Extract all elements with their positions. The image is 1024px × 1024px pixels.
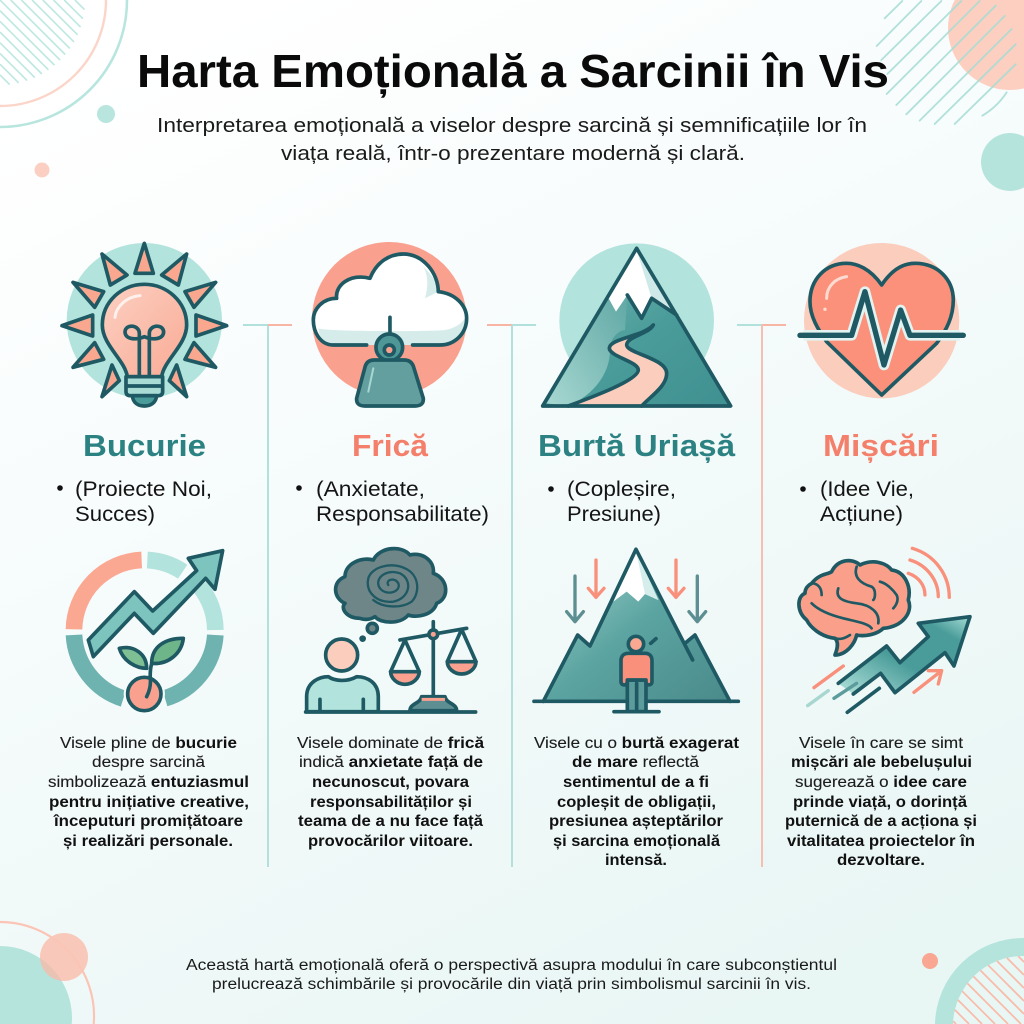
description: Mișcări: sugerează o idee care	[795, 774, 967, 791]
description: Frică: indică anxietate față de	[299, 754, 483, 771]
description: Frică	[297, 735, 484, 850]
icon: brain with rising arrow	[799, 548, 970, 712]
description: Burtă Uriașă: sentimentul de a fi	[563, 774, 709, 791]
decoration: top left circles	[0, 0, 127, 178]
panel: Frică	[296, 242, 489, 850]
description: Burtă Uriașă	[534, 735, 740, 869]
description: Frică: Visele dominate de frică	[297, 735, 484, 752]
footer note: prelucrează schimbările și provocările din viață prin simbolismul sarcinii în vis.	[212, 976, 811, 993]
bullet: Proiecte Noi, Succes: Succes)	[75, 503, 155, 526]
icon: person under mountain with pressure arrows	[534, 549, 738, 712]
description: Bucurie: și realizări personale.	[63, 833, 233, 850]
bullet: Idee Vie, Acțiune	[800, 478, 914, 526]
heading: Frică: Frică	[352, 428, 429, 463]
icon: heart with pulse	[800, 243, 963, 398]
icon: mountain with path	[543, 243, 731, 406]
bullet: Copleșire, Presiune: (Copleșire,	[567, 478, 676, 501]
heading: Bucurie: Bucurie	[83, 428, 206, 463]
description: Frică: teama de a nu face față	[298, 813, 483, 830]
description: Bucurie: pentru inițiative creative,	[49, 794, 249, 811]
bullet: Idee Vie, Acțiune: (Idee Vie,	[820, 478, 914, 501]
bullet: Proiecte Noi, Succes	[57, 478, 212, 526]
bullet: Copleșire, Presiune: Presiune)	[567, 503, 661, 526]
description: Burtă Uriașă: Visele cu o burtă exagerat	[534, 735, 740, 752]
subtitle	[157, 115, 867, 165]
description: Bucurie: Visele pline de bucurie	[60, 735, 237, 752]
subtitle: Interpretarea emoțională a viselor despre sarcină și semnificațiile lor în	[157, 115, 867, 137]
description: Frică: provocărilor viitoare.	[308, 833, 473, 850]
bullet: Anxietate, Responsabilitate: Responsabilitate)	[316, 503, 489, 526]
heading: Burtă Uriașă: Burtă Uriașă	[538, 428, 736, 463]
icon: light bulb with rays	[62, 243, 227, 406]
decoration: top right circles	[877, 0, 1024, 191]
panel: Bucurie	[48, 243, 249, 850]
footer note: Această hartă emoțională oferă o perspectivă asupra modului în care subconștientul	[186, 957, 837, 974]
description: Mișcări: vitalitatea proiectelor în	[787, 833, 975, 850]
bullet: Copleșire, Presiune	[548, 478, 676, 526]
dividers between columns	[243, 325, 786, 867]
description: Bucurie	[48, 735, 249, 850]
description: Bucurie: începuturi promițătoare	[53, 813, 243, 830]
icon: cloud with weight	[312, 242, 467, 406]
icon: growth arrow and sprout	[74, 551, 223, 715]
subtitle: viața reală, într-o prezentare modernă și clară.	[281, 143, 745, 165]
bullet: Idee Vie, Acțiune: Acțiune)	[820, 503, 903, 526]
bullet: Anxietate, Responsabilitate: (Anxietate,	[316, 478, 425, 501]
description: Mișcări: mișcări ale bebelușului	[791, 754, 972, 771]
description: Mișcări	[785, 735, 977, 869]
description: Frică: responsabilităților și	[310, 794, 472, 811]
description: Mișcări: puternică de a acționa și	[785, 813, 977, 830]
title: Harta Emoțională a Sarcinii în Vis	[137, 45, 889, 98]
panel: Mișcări	[785, 243, 977, 869]
heading: Mișcări: Mișcări	[823, 428, 939, 463]
decoration: bottom right circles	[922, 938, 1024, 1024]
description: Burtă Uriașă: de mare reflectă	[572, 754, 699, 771]
description: Frică: necunoscut, povara	[312, 774, 469, 791]
panel: Burtă Uriașă	[534, 243, 740, 869]
description: Mișcări: Visele în care se simt	[799, 735, 964, 752]
description: Burtă Uriașă: copleșit de obligații,	[557, 794, 716, 811]
bullet: Anxietate, Responsabilitate	[296, 478, 489, 526]
bullet: Proiecte Noi, Succes: (Proiecte Noi,	[75, 478, 212, 501]
description: Burtă Uriașă: presiunea așteptărilor	[549, 813, 723, 830]
icon: storm thought, person and scales	[306, 549, 476, 712]
description: Burtă Uriașă: intensă.	[605, 852, 667, 869]
description: Mișcări: prinde viață, o dorință	[793, 794, 967, 811]
description: Mișcări: dezvoltare.	[837, 852, 925, 869]
description: Burtă Uriașă: și sarcina emoțională	[553, 833, 720, 850]
description: Bucurie: simbolizează entuziasmul	[48, 774, 249, 791]
decoration: bottom left circles	[0, 922, 94, 1024]
description: Bucurie: despre sarcină	[92, 754, 205, 771]
footer note	[186, 957, 837, 993]
